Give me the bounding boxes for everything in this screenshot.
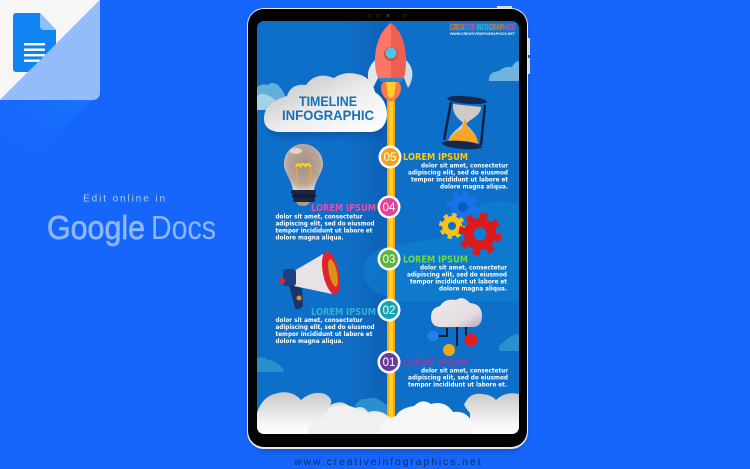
step 04: adipiscing elit, sed do eiusmod	[276, 220, 374, 228]
step 05: dolore magna aliqua.	[440, 184, 508, 190]
logo: creative infographics: WWW.CREATIVEINFOGRAPHICS.NET	[450, 32, 515, 36]
title cloud	[264, 73, 388, 137]
step 05: 05	[384, 152, 396, 164]
step 01: 01	[383, 357, 395, 369]
step 03: adipiscing elit, sed do eiusmod	[407, 272, 507, 278]
step 01: adipiscing elit, sed do eiusmod	[408, 374, 508, 382]
step 04: dolor sit amet, consectetur	[276, 214, 362, 220]
step 03: 03	[383, 254, 395, 266]
step 03	[378, 248, 507, 292]
step 05: LOREM IPSUM	[403, 152, 468, 163]
step 02: dolore magna aliqua.	[276, 338, 344, 345]
screen	[257, 21, 519, 434]
step 02: dolor sit amet, consectetur	[276, 317, 362, 324]
logo text: Google Docs	[47, 209, 216, 246]
logo: creative infographics: CREATIVE INFOGRAPHICS	[450, 22, 515, 32]
step 05: tempor incididunt ut labore et	[411, 176, 508, 184]
step 04: 04	[383, 202, 396, 214]
step 03: LOREM IPSUM	[403, 254, 468, 266]
icon: document	[13, 13, 56, 72]
folded corner panel	[0, 0, 100, 155]
timeline rod	[387, 90, 395, 418]
bottom clouds	[257, 392, 519, 434]
step 03: dolore magna aliqua.	[439, 286, 507, 292]
tablet	[247, 6, 530, 452]
icon: megaphone	[279, 250, 343, 310]
step 05: dolor sit amet, consectetur	[421, 162, 508, 170]
clouds background	[257, 61, 519, 414]
step 04: dolore magna aliqua.	[276, 234, 344, 242]
step 04	[276, 196, 400, 242]
logo: creative infographics	[449, 23, 516, 35]
step 02: 02	[383, 305, 395, 317]
step 03: dolor sit amet, consectetur	[420, 264, 507, 272]
icon: gears	[441, 193, 498, 252]
logo text: Google Docs: Docs	[151, 209, 216, 246]
step 04: tempor incididunt ut labore et	[276, 228, 373, 234]
icon: light bulb	[284, 144, 323, 206]
step 02: LOREM IPSUM	[311, 307, 376, 318]
rocket	[368, 23, 412, 102]
step 04: LOREM IPSUM	[311, 203, 376, 214]
icon: hourglass	[442, 94, 487, 151]
background hills	[395, 201, 519, 301]
rod shadow band	[364, 21, 387, 415]
title text: TIMELINE	[299, 93, 357, 109]
step 01	[378, 350, 508, 388]
step 02: tempor incididunt ut labore et	[276, 331, 373, 338]
step 05	[378, 146, 508, 190]
text: website url: www.creativeinfographics.net	[293, 456, 482, 468]
logo text: Google Docs: Google	[47, 209, 145, 246]
step 01: LOREM IPSUM	[403, 358, 468, 368]
text: edit online in: Edit online in	[83, 194, 167, 204]
step 02	[276, 298, 400, 345]
step 01: tempor incididunt ut labore et.	[408, 382, 507, 388]
step 03: tempor incididunt ut labore et	[410, 278, 507, 286]
icon: cloud network	[428, 298, 482, 356]
step 01: dolor sit amet, consectetur	[421, 368, 508, 374]
step 02: adipiscing elit, sed do eiusmod	[276, 324, 374, 331]
title cloud: INFOGRAPHIC	[282, 107, 374, 123]
step 05: adipiscing elit, sed do eiusmod	[408, 170, 508, 176]
